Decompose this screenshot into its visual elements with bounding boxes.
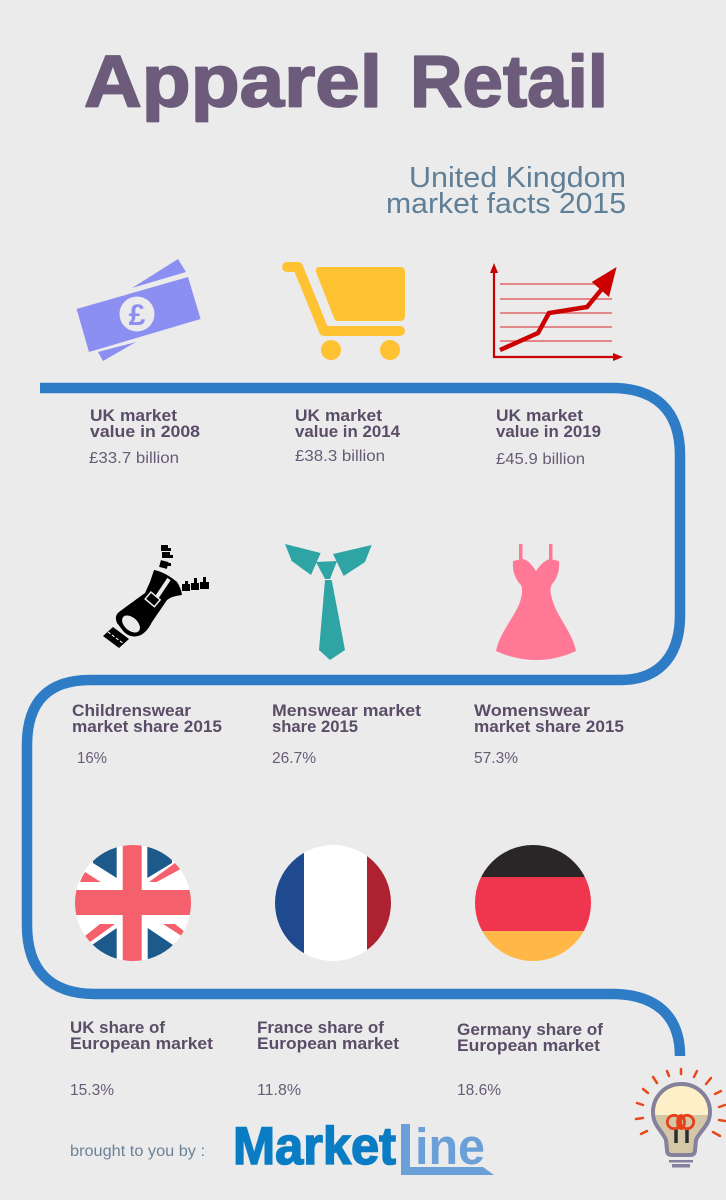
text: menswear share: 26.7% [272,750,316,767]
text: childrenswear share: Childrenswear [72,702,192,720]
text: UK market value 2014: UK market [295,407,383,425]
icon: UK flag [75,845,191,961]
icon: light bulb [636,1069,725,1168]
text: UK market value 2014: £38.3 billion [295,448,385,465]
text: UK market value 2014 [295,407,401,465]
icon: banknotes: £ [129,299,146,332]
text: UK market value 2019 [496,407,601,468]
text: UK market value 2019: £45.9 billion [496,451,585,468]
text: womenswear share: Womenswear [474,702,591,720]
text: France share: European market [257,1035,400,1053]
icon: dress [496,544,576,660]
text: childrenswear share [72,702,222,767]
text: Germany share: 18.6% [457,1082,501,1099]
logo: MarketLine: ine [415,1118,485,1175]
logo: MarketLine: Market [233,1117,396,1176]
icon: zipper [103,545,209,648]
icon: banknotes [77,259,201,361]
text: UK share: UK share of [70,1019,166,1037]
logo: MarketLine [233,1117,494,1176]
text: UK share: European market [70,1035,214,1053]
text: UK market value 2008: £33.7 billion [89,450,179,467]
icon: necktie [285,544,372,660]
text: UK market value 2008: value in 2008 [90,423,200,441]
subtitle [386,162,626,220]
text: France share: France share of [257,1019,385,1037]
text: UK share [70,1019,214,1099]
text: menswear share: Menswear market [272,702,422,720]
subtitle: United Kingdom [409,162,626,194]
icon: rising line chart [490,263,623,361]
text: menswear share [272,702,422,767]
text: UK market value 2014: value in 2014 [295,423,401,441]
text: UK market value 2008: UK market [90,407,178,425]
text: Germany share [457,1021,604,1099]
text: childrenswear share: 16% [77,750,107,767]
text: UK market value 2019: UK market [496,407,584,425]
text: France share [257,1019,400,1099]
icon: shopping cart [287,267,405,360]
text: UK share: 15.3% [70,1082,114,1099]
text: UK market value 2019: value in 2019 [496,423,601,441]
text: childrenswear share: market share 2015 [72,718,222,736]
text: Germany share: Germany share of [457,1021,604,1039]
timeline path [27,388,680,1056]
subtitle: market facts 2015 [386,188,626,220]
title: Retail [410,42,608,122]
text: womenswear share: market share 2015 [474,718,624,736]
text: UK market value 2008 [89,407,200,467]
text: France share: 11.8% [257,1082,301,1099]
title: Apparel [84,42,382,122]
title [84,42,608,122]
text: Germany share: European market [457,1037,601,1055]
text: womenswear share [474,702,624,767]
text: brought to you by: brought to you by : [70,1143,205,1160]
text: menswear share: share 2015 [272,718,358,736]
icon: France flag [275,845,391,961]
text: womenswear share: 57.3% [474,750,518,767]
icon: Germany flag [475,845,591,961]
